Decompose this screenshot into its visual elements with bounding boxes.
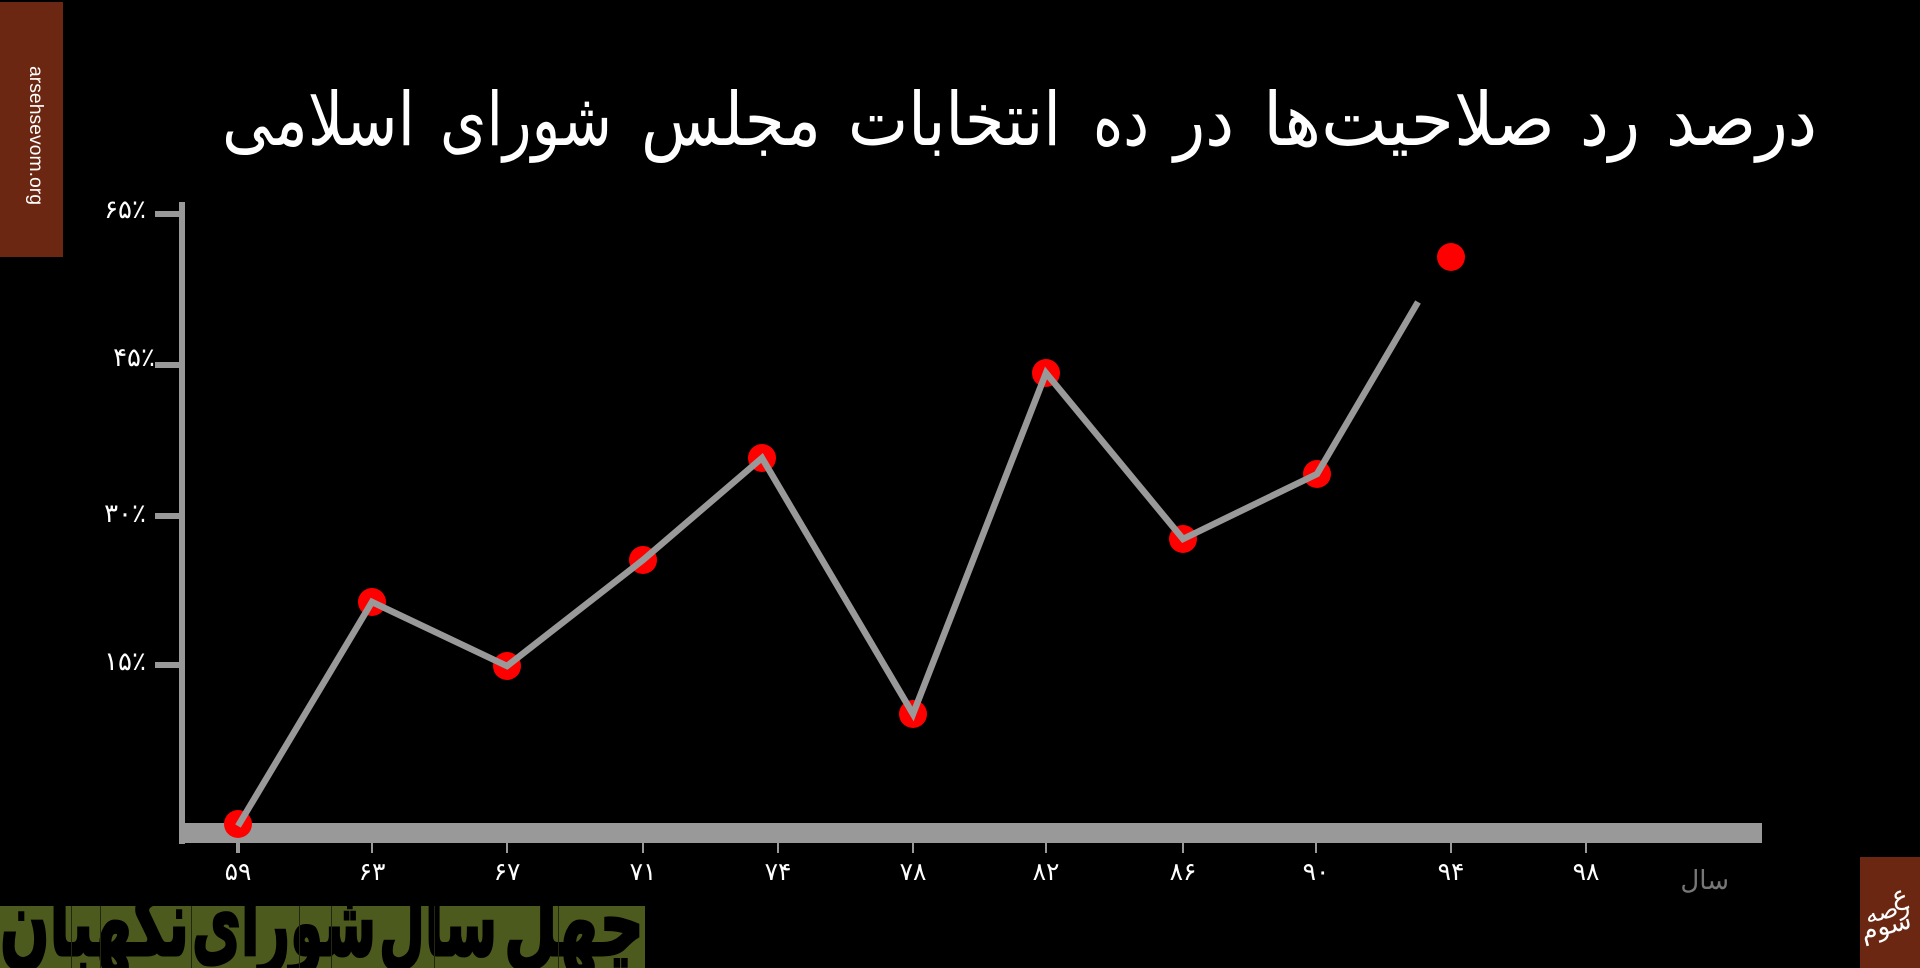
title: شورای bbox=[440, 77, 612, 163]
title: صلاحیت‌ها bbox=[1263, 77, 1555, 163]
y axis labels: ۶۵٪ bbox=[104, 195, 146, 225]
y axis labels bbox=[104, 195, 155, 677]
panel: top-left site tab: arsehsevom.org bbox=[25, 66, 46, 205]
y axis labels: ۳۰٪ bbox=[104, 499, 146, 529]
title: در bbox=[1171, 77, 1234, 163]
y axis bbox=[155, 202, 185, 844]
x axis ticks bbox=[236, 843, 1587, 853]
x axis year labels: ۵۹ bbox=[225, 857, 251, 886]
x axis year labels: ۸۶ bbox=[1170, 857, 1196, 886]
title bbox=[222, 77, 1817, 163]
x axis year labels: ۹۰ bbox=[1303, 857, 1329, 886]
x axis year labels: ۶۳ bbox=[359, 857, 385, 886]
x axis year labels: ۶۷ bbox=[494, 857, 520, 886]
title: انتخابات bbox=[848, 77, 1061, 163]
y axis labels: ۴۵٪ bbox=[113, 343, 155, 373]
title: رد bbox=[1580, 77, 1640, 163]
x axis unit label: سال bbox=[1680, 866, 1729, 896]
panel: bottom-right logo tab bbox=[1857, 857, 1920, 968]
x axis year labels: ۹۴ bbox=[1438, 857, 1464, 886]
y axis labels: ۱۵٪ bbox=[104, 647, 146, 677]
panel: bottom-right logo tab: ع bbox=[1889, 880, 1910, 912]
panel: top-left site tab bbox=[0, 2, 63, 257]
footer banner bbox=[0, 870, 645, 968]
x axis year labels: ۸۲ bbox=[1033, 857, 1059, 886]
title: درصد bbox=[1666, 77, 1817, 163]
x axis year labels: ۷۸ bbox=[900, 857, 926, 886]
title: ده bbox=[1093, 77, 1149, 163]
data line bbox=[238, 302, 1418, 826]
panel: bottom-right logo tab: سوم bbox=[1857, 905, 1915, 947]
x axis year labels bbox=[225, 857, 1599, 886]
title: اسلامی bbox=[222, 77, 415, 163]
x axis year labels: ۹۸ bbox=[1573, 857, 1599, 886]
x axis year labels: ۷۱ bbox=[630, 857, 656, 886]
panel: bottom-right logo tab: رصه bbox=[1862, 891, 1912, 930]
x axis bar bbox=[180, 823, 1762, 843]
x axis year labels: ۷۴ bbox=[765, 857, 791, 886]
data points bbox=[224, 243, 1465, 838]
title: مجلس bbox=[641, 77, 821, 163]
